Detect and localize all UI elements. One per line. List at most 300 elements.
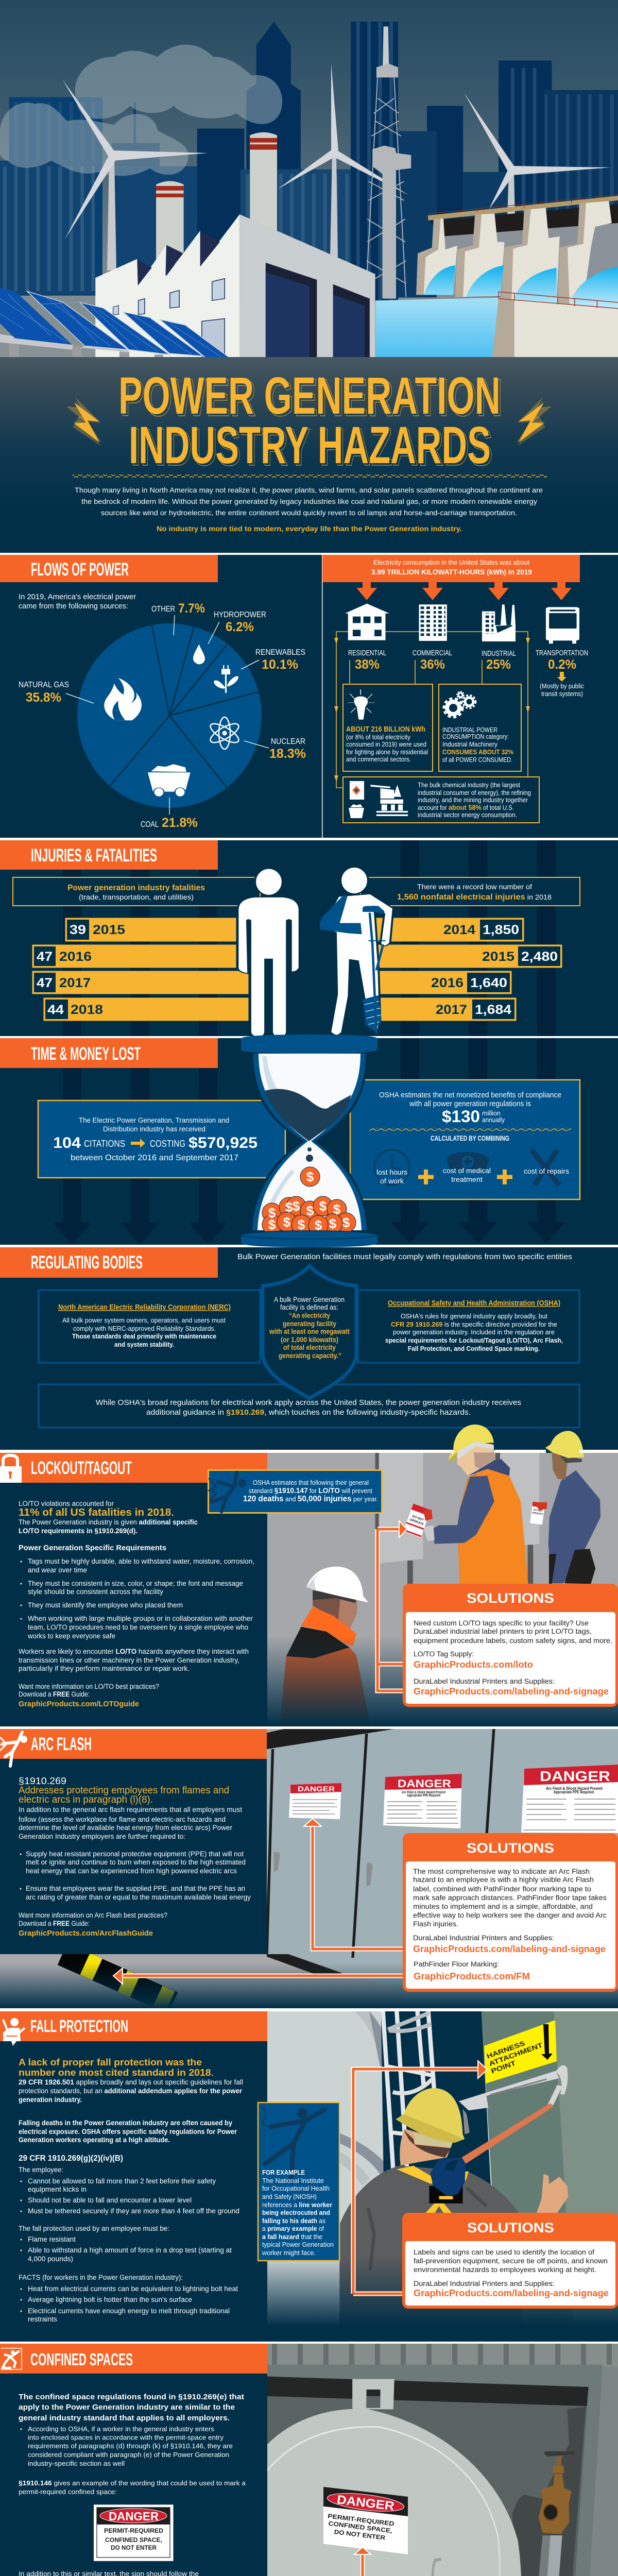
wavy divider xyxy=(72,474,547,478)
pie labels: NUCLEAR xyxy=(271,737,305,746)
callout: NIOSH example: typical Power Generation xyxy=(262,2241,334,2248)
section divider injuries xyxy=(0,838,618,840)
coins: $ xyxy=(293,1198,300,1214)
shield: facility definition: (or 1,000 kilowatts) xyxy=(281,1336,338,1344)
shield: facility definition: generating capacity.” xyxy=(279,1352,341,1360)
box: OSHA benefits: of work xyxy=(380,1177,404,1185)
arrow: fall connector xyxy=(353,2061,487,2294)
transportation note xyxy=(540,672,584,698)
icon: clock xyxy=(374,1150,409,1185)
heading: confined spaces: CONFINED SPACES xyxy=(30,2350,133,2369)
pie labels: OTHER xyxy=(151,605,175,614)
text: confined body: According to OSHA, if a worker in the general industry enters xyxy=(28,2425,215,2433)
pie labels: HYDROPOWER xyxy=(214,611,266,619)
icon: electrocuted line worker xyxy=(262,2107,324,2179)
text: fall body: 29 CFR 1926.501 applies broadly and lays out specific guidelines for fall xyxy=(19,2078,243,2086)
solutions box: arc flash: PathFinder Floor Marking: xyxy=(414,1960,499,1968)
sector labels: 25% xyxy=(486,657,511,672)
box: industrial machinery: Industrial Machinery xyxy=(442,741,498,748)
solutions box: fall protection: Labels and signs can be used to identify the location of xyxy=(414,2248,594,2256)
solutions box: lockout: GraphicProducts.com/labeling-and-signage xyxy=(414,1686,609,1697)
shield: facility definition: of total electricity xyxy=(283,1344,336,1351)
box: industrial machinery xyxy=(439,684,521,771)
solutions box: lockout: LO/TO Tag Supply: xyxy=(414,1650,474,1658)
coins xyxy=(262,1167,356,1235)
solutions box: arc flash: The most comprehensive way to indicate an Arc Flash xyxy=(413,1868,590,1875)
text: fall body: The employee: xyxy=(19,2166,63,2174)
box: OSHA benefits: treatment xyxy=(451,1175,483,1183)
title xyxy=(118,366,503,477)
box: fatalities heading xyxy=(13,877,260,906)
hatch tab xyxy=(352,2379,394,2409)
lockout tags: OPERATE xyxy=(532,1512,543,1515)
smoke clouds xyxy=(0,45,282,176)
sign: permit required on hatch: PERMIT-REQUIRED xyxy=(328,2513,395,2528)
text: confined body: into enclosed spaces in accordance with the permit-space entry xyxy=(28,2434,224,2441)
pie labels: NATURAL GAS xyxy=(19,681,69,689)
solutions box: lockout: GraphicProducts.com/loto xyxy=(414,1659,533,1670)
solutions box: fall protection: GraphicProducts.com/labeling-and-signage xyxy=(414,2288,609,2298)
head xyxy=(400,2129,453,2166)
text: fall body: A lack of proper fall protection was the xyxy=(19,2057,202,2067)
box: citations: The Electric Power Generation, Transmission and xyxy=(79,1116,229,1124)
text: fall body: Should not be able to fall and encounter a lower level xyxy=(28,2196,192,2204)
sling xyxy=(320,895,362,934)
lanyard xyxy=(462,2103,554,2164)
shield: facility definition: A bulk Power Generation xyxy=(274,1296,345,1303)
solutions box: arc flash: mark safe approach distances. PathFinder floor tape takes xyxy=(413,1894,607,1902)
text: fall body: The fall protection used by an employee must be: xyxy=(19,2225,169,2232)
callout: prevented deaths xyxy=(208,1470,382,1513)
text: arc flash body: heat energy that can be experienced from high powered electric arcs xyxy=(26,1867,237,1875)
callout: prevented deaths: 120 deaths and 50,000 injuries per year. xyxy=(243,1495,378,1503)
main worker xyxy=(468,1459,510,1476)
lattice tower xyxy=(366,26,411,299)
box: NERC xyxy=(39,1290,260,1363)
dam and water xyxy=(375,195,618,363)
heading: arc flash xyxy=(0,1729,267,1766)
icon: padlock xyxy=(0,1455,22,1483)
source intro text xyxy=(19,592,136,611)
text: fall body: Generation workers operating at a high altitude. xyxy=(19,2136,170,2144)
callout: prevented deaths: OSHA estimates that following their general xyxy=(253,1479,369,1486)
pie labels: 35.8% xyxy=(26,690,61,705)
solar panels xyxy=(0,287,229,357)
text: fall body: equipment kicks in xyxy=(28,2185,87,2193)
solutions box: arc flash: GraphicProducts.com/FM xyxy=(414,1971,530,1981)
shield: facility definition: generating facility xyxy=(283,1320,336,1328)
transportation note: transit systems) xyxy=(541,690,583,698)
box: bulk chemical industry: industrial sector energy consumption. xyxy=(418,811,517,819)
hatch vessel xyxy=(266,2409,521,2576)
icon: wrench and screwdriver xyxy=(531,1150,559,1185)
text: confined body: apply to the Power Generation industry are similar to the xyxy=(19,2403,235,2412)
icon: medical cap xyxy=(447,1152,489,1170)
coins: $ xyxy=(306,1169,314,1184)
section divider fall protection xyxy=(0,2008,618,2011)
pie labels: 6.2% xyxy=(226,620,254,634)
heading: regulating bodies xyxy=(0,1247,218,1278)
text: arc flash body: melt or ignite and continue to burn when exposed to the high estimated xyxy=(26,1858,246,1866)
illustration: fall protection worker xyxy=(267,2011,618,2324)
hard hat xyxy=(396,2088,465,2143)
text: arc flash body: Ensure that employees wear the supplied PPE, and that the PPE has an xyxy=(26,1885,245,1892)
panel: lockout tagout xyxy=(0,1453,618,1708)
text: lockout body: Download a FREE Guide: xyxy=(19,1690,90,1698)
text: lockout body: and wear over time xyxy=(28,1566,87,1574)
solutions box: fall protection: DuraLabel Industrial Printers and Supplies: xyxy=(414,2280,555,2287)
box: OSHA benefits: cost of medical xyxy=(443,1166,491,1175)
coins: $ xyxy=(342,1215,350,1230)
box: injuries heading xyxy=(360,877,580,906)
box: OSHA: Occupational Safety and Health Administration (OSHA) xyxy=(388,1299,560,1308)
icon: coal cart xyxy=(148,764,191,796)
icon: small coal cart xyxy=(349,804,364,818)
solutions box: arc flash: minutes to implement and is a simple, affordable, and xyxy=(413,1903,593,1910)
text: fall body: Heat from electrical currents can be equivalent to lightning bolt heat xyxy=(28,2285,238,2293)
pie labels: 10.1% xyxy=(262,657,298,672)
box: OSHA xyxy=(358,1290,579,1363)
crutch xyxy=(363,906,384,913)
text: fall body xyxy=(19,2057,243,2323)
text: arc flash body: determine the level of available heat energy from electric arcs) Power xyxy=(19,1824,232,1832)
text: lockout body: Tags must be highly durable, able to withstand water, moisture, corrosion, xyxy=(28,1557,254,1565)
text: confined body: permit-required confined space: xyxy=(19,2488,117,2496)
coins: $ xyxy=(298,1217,305,1232)
box: citations xyxy=(38,1100,285,1178)
icon: flame xyxy=(104,678,142,720)
coins: $ xyxy=(319,1198,327,1214)
solutions box: fall protection: environmental hazards to employees working at height. xyxy=(414,2266,596,2274)
intro text: the bedrock of modern life. Without the power generated by legacy industries like coal and natural gas, or more modern renewable energy xyxy=(81,497,537,505)
floor and hazard tape xyxy=(0,1954,618,2008)
heading: flows of power: FLOWS OF POWER xyxy=(31,560,129,580)
box: lighting: consumed in 2019) were used xyxy=(346,741,426,748)
solutions box: lockout: SOLUTIONS xyxy=(467,1590,554,1606)
box: OSHA: special requirements for Lockout/Tagout (LO/TO), Arc Flash, xyxy=(385,1336,563,1344)
callout: NIOSH example: FOR EXAMPLE xyxy=(262,2168,305,2176)
heading: time and money: TIME & MONEY LOST xyxy=(31,1044,141,1064)
front worker xyxy=(280,1648,369,1721)
box: OSHA: power generation industry. Included in the regulation are xyxy=(393,1328,555,1336)
callout: NIOSH example: for Occupational Health xyxy=(262,2185,330,2192)
sign: permit required on hatch: CONFINED SPACE, xyxy=(328,2520,393,2534)
label small: DANGER xyxy=(298,1785,335,1793)
bar chart: fatalities: 47 xyxy=(37,976,53,990)
solutions box: fall protection xyxy=(402,2213,618,2309)
sign: harness attachment point: ATTACHMENT xyxy=(488,2041,544,2067)
source intro text: In 2019, America's electrical power xyxy=(19,592,136,601)
text: confined body: requirements of paragraphs (d) through (k) of §1910.146, they are xyxy=(28,2442,233,2450)
heading: arc flash: ARC FLASH xyxy=(31,1734,92,1754)
sector labels xyxy=(348,649,588,672)
heading: fall protection: FALL PROTECTION xyxy=(30,2016,128,2036)
wind turbines xyxy=(62,63,611,270)
bar chart: fatalities: 2018 xyxy=(71,1003,103,1017)
harness pack xyxy=(430,2157,466,2196)
arrow: confined connector xyxy=(354,2547,412,2576)
icon: lightning bolt left xyxy=(66,397,101,446)
coins: $ xyxy=(268,1217,276,1232)
hourglass xyxy=(251,1054,368,1235)
box: bulk chemical industry: account for about 58% of total U.S. xyxy=(418,803,514,811)
label large: Appropriate PPE Required xyxy=(554,1789,594,1794)
icon: confined space figure xyxy=(1,2348,22,2369)
box: OSHA benefits: CALCULATED BY COMBINING xyxy=(431,1134,509,1142)
solutions box: arc flash: SOLUTIONS xyxy=(467,1840,554,1856)
panel: regulating bodies xyxy=(0,1247,579,1428)
shield: facility definition xyxy=(263,1266,356,1398)
box: lighting xyxy=(343,684,433,771)
box: OSHA benefits: with all power generation regulations is xyxy=(409,1100,531,1108)
text: arc flash body: Generation Industry employers are further required to: xyxy=(19,1833,185,1840)
text: lockout body: 11% of all US fatalities in 2018 . xyxy=(19,1507,174,1518)
solutions box: arc flash: Flash injuries. xyxy=(413,1920,458,1928)
text: arc flash body: follow (assess the workplace for flame and electric-arc hazards and xyxy=(19,1816,226,1823)
panel: injuries and fatalities xyxy=(0,840,580,1037)
plus signs xyxy=(418,1170,512,1184)
sign: danger permit required xyxy=(94,2505,173,2561)
callout: NIOSH example: and Safety (NIOSH) xyxy=(262,2193,317,2200)
bar chart: fatalities: 2017 xyxy=(59,976,91,990)
box: NERC: North American Electric Reliability Corporation (NERC) xyxy=(58,1303,231,1312)
text: arc flash body: Want more information on Arc Flash best practices? xyxy=(19,1911,167,1919)
text: lockout body: works to keep everyone safe xyxy=(27,1632,115,1640)
bar chart: fatalities: 47 xyxy=(37,950,53,964)
figure: standing worker xyxy=(237,869,300,1037)
sign: danger permit required: CONFINED SPACE, xyxy=(105,2536,162,2544)
icon: light bulb xyxy=(348,689,374,720)
text: lockout body: Workers are likely to encounter LO/TO hazards anywhere they interact with xyxy=(19,1648,249,1655)
coins: $ xyxy=(283,1214,291,1230)
glass body xyxy=(251,1054,368,1230)
shirt xyxy=(339,2166,518,2321)
box: citations: COSTING xyxy=(150,1139,185,1149)
icon: barrel xyxy=(350,781,364,800)
sign: permit required on hatch: DANGER xyxy=(336,2493,395,2514)
text: lockout body: team, LO/TO procedures need to be overseen by a single employee who xyxy=(28,1623,248,1631)
sign: harness attachment point: HARNESS xyxy=(486,2039,526,2060)
text: arc flash body: Supply heat resistant personal protective equipment (PPE) that will not xyxy=(26,1850,244,1858)
text: arc flash body: arc rating of greater than or equal to the maximum available heat energy xyxy=(26,1893,251,1901)
box: bulk chemical industry: industry, and the mining industry together xyxy=(418,796,528,804)
header illustration: power plant skyline xyxy=(0,0,618,374)
rear worker hat above divider xyxy=(449,1425,584,1461)
solutions box: arc flash: GraphicProducts.com/labeling-and-signage xyxy=(413,1944,606,1954)
text: lockout body: LO/TO requirements in §1910.269(d). xyxy=(19,1527,138,1535)
box: NERC: and system stability. xyxy=(114,1341,174,1348)
panel: flows of power xyxy=(0,555,588,838)
callout: NIOSH example: a fall hazard that the xyxy=(262,2233,322,2241)
box: 1910.269 statement xyxy=(39,1384,579,1428)
text: confined body: industry-specific section as well xyxy=(28,2460,125,2467)
consumption banner: Electricity consumption in the United States was about xyxy=(373,559,530,566)
arrows: arc flash connectors xyxy=(113,1819,412,1984)
header dark ground xyxy=(0,357,618,512)
coins: $ xyxy=(329,1216,337,1231)
text: lockout body: Power Generation Specific Requirements xyxy=(19,1544,166,1552)
bar chart: fatalities: 2016 xyxy=(59,950,92,964)
solutions box: arc flash xyxy=(403,1833,618,1992)
callout: NIOSH example: being electrocuted and xyxy=(262,2209,330,2216)
heading: flows of power xyxy=(0,555,218,582)
callout: NIOSH example xyxy=(258,2103,339,2261)
bar chart: fatalities xyxy=(32,918,248,1021)
label medium: DANGER xyxy=(398,1778,451,1790)
text: fall body: generation industry. xyxy=(19,2096,82,2104)
box: OSHA: Fall Protection, and Confined Space marking. xyxy=(408,1345,540,1352)
fade to background xyxy=(267,2257,618,2326)
lockout tags xyxy=(403,1502,547,1537)
icon: oil rig xyxy=(370,785,408,816)
fade to background xyxy=(267,1636,618,1726)
label small xyxy=(289,1783,341,1819)
harness xyxy=(397,2166,469,2215)
box: injuries heading: 1,560 nonfatal electrical injuries in 2018 xyxy=(397,893,552,902)
solutions box: lockout: Need custom LO/TO tags specific to your facility? Use xyxy=(414,1619,589,1627)
connector arrowheads xyxy=(334,638,530,782)
sign: permit required on hatch xyxy=(323,2487,408,2554)
icon: bus xyxy=(546,607,579,643)
solutions box: arc flash: label, combined with PathFinder floor marking tape to xyxy=(413,1885,591,1893)
icon: factory xyxy=(482,604,516,641)
text: fall body: Average lightning bolt is hotter than the sun's surface xyxy=(28,2296,192,2303)
icon: office building xyxy=(419,604,447,641)
sector labels: INDUSTRIAL xyxy=(482,649,516,658)
heading: time and money xyxy=(0,1038,218,1068)
label medium: Appropriate PPE Required xyxy=(407,1794,440,1798)
section divider top xyxy=(0,553,618,555)
source intro text: came from the following sources: xyxy=(19,602,128,611)
box: OSHA benefits: OSHA estimates the net monetized benefits of compliance xyxy=(379,1091,561,1099)
sector labels: 38% xyxy=(355,657,380,672)
text: fall body: number one most cited standard in 2018 . xyxy=(19,2067,214,2078)
box: bulk chemical industry xyxy=(343,777,539,823)
box: industrial machinery: INDUSTRIAL POWER xyxy=(442,726,497,734)
box: lighting: (or 8% of total electricity xyxy=(346,734,411,741)
box: NERC: Those standards deal primarily with maintenance xyxy=(72,1332,216,1340)
bar chart: fatalities: 2015 xyxy=(93,923,125,937)
bar chart: nonfatal injuries: 2015 xyxy=(482,950,514,964)
text: lockout body: LO/TO violations accounted for xyxy=(19,1500,114,1507)
hourglass top plate xyxy=(241,1035,377,1054)
icon: lightning bolt right xyxy=(517,397,552,446)
coins: $ xyxy=(285,1199,293,1215)
bar chart: nonfatal injuries: 2014 xyxy=(443,923,475,937)
heading: injuries and fatalities xyxy=(0,840,218,870)
section divider time and money xyxy=(0,1036,618,1038)
text: fall body: electrical exposure. OSHA offers specific safety regulations for Power xyxy=(19,2128,237,2136)
bar chart: fatalities: 44 xyxy=(47,1003,64,1017)
box: bulk chemical industry: industrial consumer of energy), the refining xyxy=(418,789,531,796)
skyline buildings xyxy=(0,22,618,302)
text: arc flash body: Download a FREE Guide: xyxy=(19,1920,90,1927)
lockout tags: DO NOT xyxy=(534,1509,543,1512)
box: OSHA benefits: $130 xyxy=(442,1107,480,1126)
text: confined body: §1910.146 gives an example of the wording that could be used to mark a xyxy=(19,2479,246,2487)
text: lockout body: style should be consistent across the facility xyxy=(28,1588,163,1596)
coins: $ xyxy=(315,1217,322,1233)
box: citations: between October 2016 and September 2017 xyxy=(71,1154,238,1162)
text: arc flash body: electric arcs in paragraph (l)(8). xyxy=(19,1794,153,1805)
icon: plug sprout xyxy=(214,665,238,693)
shield: facility definition: “An electricity xyxy=(289,1312,330,1319)
callout: NIOSH example: falling to his death as xyxy=(262,2217,325,2225)
box: fatalities heading: (trade, transportation, and utilities) xyxy=(79,893,194,901)
text: lockout body: Want more information on LO/TO best practices? xyxy=(19,1683,159,1690)
floor band xyxy=(267,1957,347,1973)
solutions box: fall protection: fall-prevention equipment, secure tie off points, and known xyxy=(414,2257,608,2265)
text: fall body: Electrical currents have enough energy to melt through traditional xyxy=(28,2307,230,2315)
coins: $ xyxy=(268,1205,276,1221)
text: fall body: Must be tethered securely if they are more than 4 feet off the ground xyxy=(28,2207,239,2215)
text: confined body: The confined space regulations found in §1910.269(e) that xyxy=(19,2393,244,2401)
rear worker xyxy=(548,1470,600,1583)
solutions box: arc flash: effective way to help workers see the danger and avoid Arc xyxy=(413,1911,607,1919)
text: lockout body: They must be consistent in size, color, or shape; the font and message xyxy=(28,1580,243,1587)
bar chart: nonfatal injuries: 2,480 xyxy=(521,950,558,964)
box: OSHA benefits: annually xyxy=(482,1116,505,1124)
danger labels xyxy=(289,1765,618,1833)
coins: $ xyxy=(306,1203,314,1218)
label medium xyxy=(383,1774,462,1828)
label large: DANGER xyxy=(540,1768,610,1784)
text: fall body: FACTS (for workers in the Power Generation industry): xyxy=(19,2274,183,2281)
box: citations: 104 xyxy=(53,1134,81,1151)
bar chart: nonfatal injuries: 1,640 xyxy=(470,976,507,990)
box: OSHA: OSHA's rules for general industry apply broadly, but xyxy=(401,1312,547,1320)
transportation note: (Mostly by public xyxy=(540,683,584,690)
illustration: arc flash cabinets xyxy=(260,1729,618,2008)
intro text: No industry is more tied to modern, everyday life than the Power Generation industry. xyxy=(157,524,462,533)
shield: facility definition: with at least one megawatt xyxy=(269,1328,350,1335)
solutions box: fall protection: SOLUTIONS xyxy=(467,2220,554,2235)
text: arc flash body xyxy=(19,1776,251,1938)
text: lockout body: GraphicProducts.com/LOTOguide xyxy=(19,1700,139,1708)
icon: shocked worker xyxy=(209,1472,246,1512)
sign: danger permit required: DO NOT ENTER xyxy=(111,2544,157,2551)
box: OSHA benefits xyxy=(350,1080,580,1199)
panel: confined spaces xyxy=(0,2344,618,2576)
text: fall body: Cannot be allowed to fall more than 2 feet before their safety xyxy=(28,2177,216,2185)
box: OSHA benefits: million xyxy=(482,1109,501,1117)
callout: NIOSH example: references a line worker xyxy=(262,2201,332,2209)
solutions box: arc flash: hazard to an employee is with a highly visible Arc Flash xyxy=(413,1876,594,1884)
intro text xyxy=(75,486,543,533)
hourglass base plate xyxy=(241,1231,377,1247)
lockout tags: OPERATE xyxy=(409,1518,424,1526)
section divider regulating xyxy=(0,1245,618,1247)
solutions box: lockout: DuraLabel industrial label printers to print LO/TO tags, xyxy=(414,1628,592,1635)
section divider confined xyxy=(0,2342,618,2344)
text: fall body: protection standards, but an additional addendum applies for the power xyxy=(19,2087,243,2095)
icon: atom xyxy=(208,717,241,749)
bar chart: nonfatal injuries: 1,684 xyxy=(475,1003,511,1017)
box: 1910.269 statement: While OSHA's broad regulations for electrical work apply across the United States, the power generation industry receives xyxy=(96,1399,521,1407)
text: confined body: general industry standard that applies to all employers. xyxy=(19,2414,230,2422)
illustration: lockout tagout workers xyxy=(267,1425,618,1730)
background column arrows xyxy=(53,840,565,1245)
icon: house xyxy=(345,604,389,640)
shield: facility definition: facility is defined as: xyxy=(280,1303,338,1311)
bar chart: nonfatal injuries: 1,850 xyxy=(483,923,519,937)
intro text: Though many living in North America may not realize it, the power plants, wind farms, and solar panels scattered throughout the continent are xyxy=(75,486,543,494)
sector labels: RESIDENTIAL xyxy=(348,649,386,657)
arrow: tag connector xyxy=(377,1521,411,1691)
box: bulk chemical industry: The bulk chemical industry (the largest xyxy=(418,782,520,789)
bar chart: nonfatal injuries: 2017 xyxy=(436,1003,467,1017)
icon: harness worker xyxy=(3,2018,25,2046)
